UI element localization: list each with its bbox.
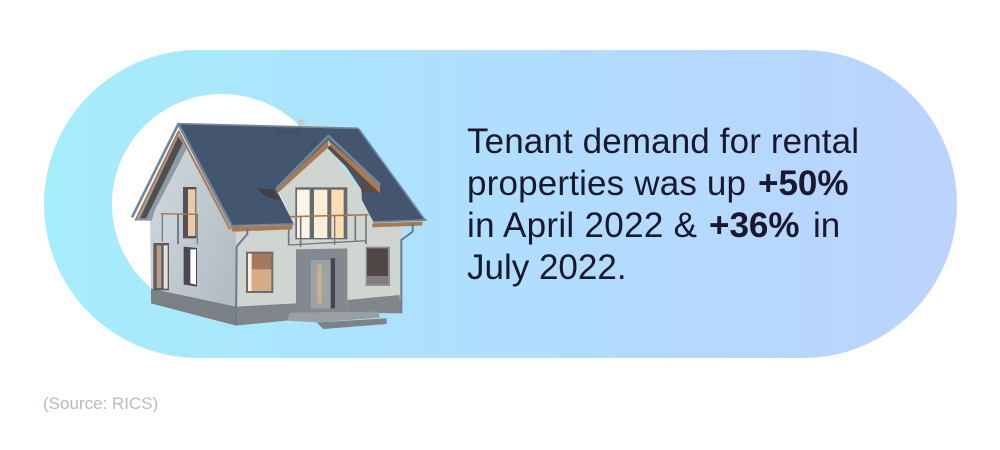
drainpipes xyxy=(236,223,413,325)
right window xyxy=(366,247,390,286)
dormer balcony railing xyxy=(289,215,369,247)
main text block xyxy=(467,122,859,287)
foundation left xyxy=(151,289,236,326)
main roof xyxy=(178,123,425,227)
roof shadow patches xyxy=(257,129,300,200)
left gable soffit shadow xyxy=(140,137,183,218)
icon: house illustration xyxy=(132,119,427,329)
foundation right xyxy=(236,295,402,326)
text line 3: in xyxy=(813,206,840,245)
left lower windows xyxy=(153,243,197,290)
entrance porch xyxy=(296,248,347,313)
left wall xyxy=(150,145,237,308)
text line 2: +50% xyxy=(758,164,848,203)
dormer soffit right xyxy=(327,145,380,193)
left balcony xyxy=(161,214,198,244)
left upper window xyxy=(183,187,196,238)
left gable soffit xyxy=(137,134,187,221)
text line 3: +36% xyxy=(709,206,800,245)
front window xyxy=(246,252,273,293)
lower eaves xyxy=(231,222,423,232)
chimney xyxy=(298,119,326,136)
front steps xyxy=(287,312,387,329)
right wall xyxy=(236,217,402,308)
dormer trim grey xyxy=(276,136,380,189)
text line 4: July 2022. xyxy=(467,248,627,287)
source note: (Source: RICS) xyxy=(43,394,158,413)
dormer trim brown xyxy=(277,140,380,194)
white circle behind house xyxy=(112,94,332,314)
text line 3: in April 2022 & xyxy=(467,206,697,245)
panel: gradient pill xyxy=(44,50,957,358)
text line 1: Tenant demand for rental xyxy=(467,122,859,161)
front door xyxy=(311,258,335,308)
text line 2: properties was up xyxy=(467,164,746,203)
dormer balcony door xyxy=(295,187,347,239)
left gable trim xyxy=(132,124,232,229)
roof grey edge xyxy=(179,124,427,226)
dormer gable wall xyxy=(279,147,373,247)
